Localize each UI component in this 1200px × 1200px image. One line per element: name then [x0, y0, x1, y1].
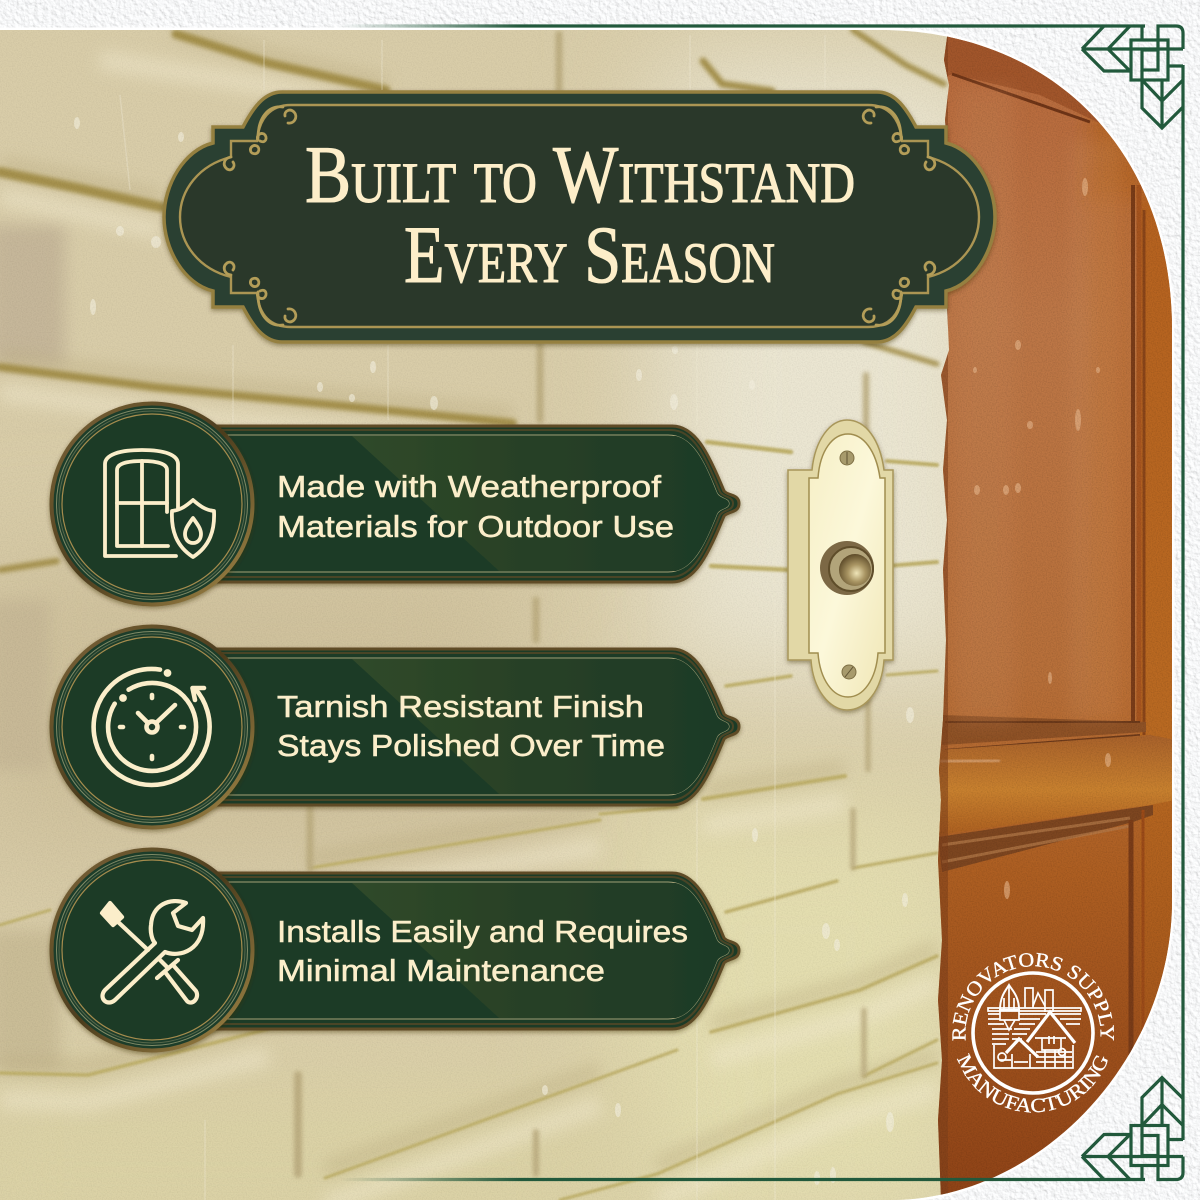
button: [820, 541, 874, 595]
title text: [305, 129, 855, 300]
door: [938, 36, 1172, 1195]
screws: [840, 451, 856, 679]
backplate: [788, 420, 893, 710]
icon: wrench and screwdriver: [102, 901, 203, 1003]
rain streaks and water drops: [74, 35, 914, 1200]
brick relief shading: [0, 28, 937, 1200]
banner shape: [200, 873, 740, 1029]
brand logo: [952, 952, 1114, 1113]
border lines: [340, 26, 1183, 1180]
corner ornament: bottom right: [1082, 1078, 1183, 1180]
icon: clock with arrow: [94, 669, 210, 785]
title plaque: [164, 92, 995, 342]
banner text: Minimal Maintenance: [277, 953, 605, 988]
doorbell: [788, 420, 893, 710]
upper panel mouldings: [1096, 204, 1130, 642]
banner text: [277, 689, 665, 763]
banner text: Stays Polished Over Time: [277, 728, 665, 763]
door head moulding: [944, 36, 1100, 123]
icon: window with shield: [105, 450, 214, 557]
logo ring: [973, 973, 1093, 1093]
medallion: [52, 626, 252, 828]
medallion: [52, 404, 252, 604]
banner text: Installs Easily and Requires: [277, 914, 688, 949]
banner text: Materials for Outdoor Use: [277, 509, 674, 544]
item 3: easy install banner: [52, 850, 740, 1050]
banner shape: [200, 649, 740, 805]
banner text: Made with Weatherproof: [277, 469, 661, 504]
banner text: [277, 914, 688, 988]
logo lettering: RENOVATORS SUPPLY: [952, 952, 1114, 1041]
medallion: [52, 850, 252, 1050]
item 2: tarnish resistant banner: [52, 626, 740, 828]
title text: Built to Withstand: [305, 129, 855, 220]
banner text: [277, 469, 674, 544]
plate face: [809, 434, 885, 697]
logo lettering: [952, 952, 1114, 1113]
door stile: [1140, 184, 1172, 1034]
lower panel mouldings: [938, 805, 1153, 872]
banner text: Tarnish Resistant Finish: [277, 689, 644, 724]
item 1: weatherproof banner: [52, 404, 740, 604]
mortar lines: [0, 30, 944, 1200]
door water drops: [973, 178, 1111, 899]
door rail: [938, 735, 1175, 835]
plaque corner scrolls: [224, 107, 935, 325]
corner ornament: top right: [1082, 26, 1183, 128]
title text: Every Season: [404, 209, 775, 300]
logo lettering: MANUFACTURING: [956, 1053, 1108, 1113]
logo house: [988, 985, 1081, 1068]
banner shape: [200, 426, 740, 582]
